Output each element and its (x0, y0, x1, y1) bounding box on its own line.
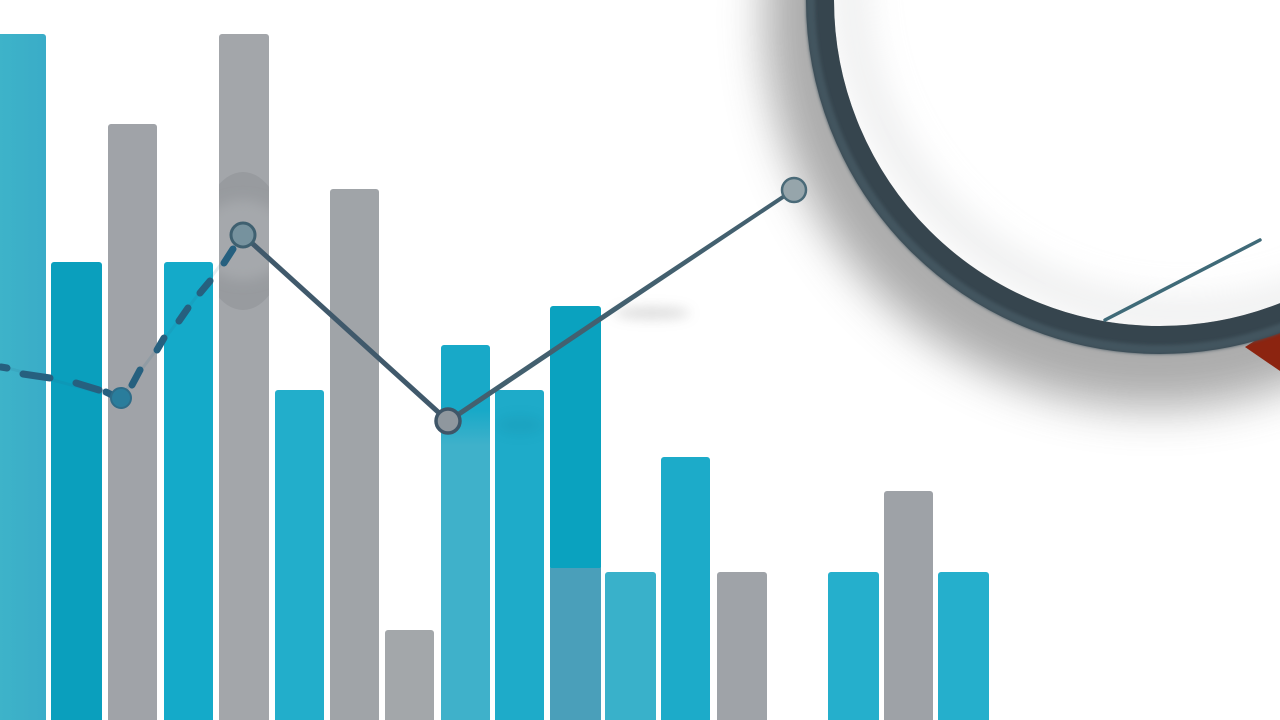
magnifier handle (1245, 325, 1280, 371)
bar chart (0, 34, 989, 720)
solid line up (447, 188, 794, 423)
data point (782, 178, 806, 202)
rim highlight (810, 0, 1280, 350)
data point (436, 409, 460, 433)
data point (231, 223, 255, 247)
magnifier shadow (765, 0, 1280, 408)
solid line down (243, 235, 448, 421)
highlight around peak point (219, 172, 269, 310)
lens inner shading (850, 0, 1280, 315)
line shadows (616, 302, 688, 324)
line chart (0, 178, 806, 433)
data point (111, 388, 131, 408)
magnifier rim (820, 0, 1280, 340)
line inside lens (1105, 240, 1260, 320)
dashed segment (1, 249, 233, 397)
magnifier (810, 0, 1280, 350)
